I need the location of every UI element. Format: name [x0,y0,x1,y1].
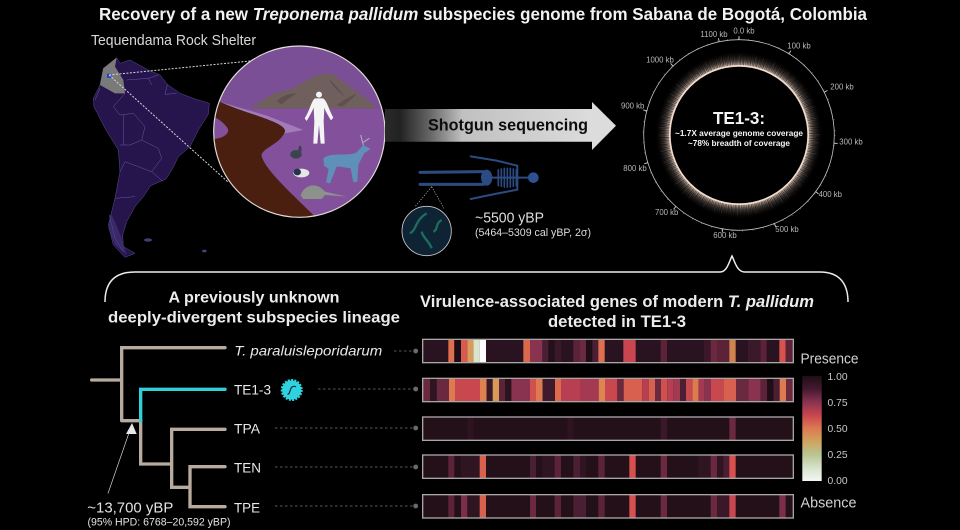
human [305,92,333,144]
coverage summary: ~1.7X average genome coverage [675,128,803,138]
tree tip labels: TE1-3 [234,381,271,397]
sample date: (5464–5309 cal yBP, 2σ) [475,227,591,239]
sample date: ~5500 yBP [475,210,544,226]
legend: 0.25 [828,450,848,461]
map: South America [93,58,209,257]
tree tip labels: T. paraluisleporidarum [234,342,383,358]
row: T. paraluisleporidarum [423,339,793,363]
scale labels: 500 kb [775,225,799,234]
heading: lineage: A previously unknown [168,290,340,306]
rabbit [290,146,302,159]
scale labels: 1000 kb [646,56,675,64]
scale labels [621,26,863,240]
scale labels: 800 kb [623,164,647,173]
Colombia [100,58,125,93]
TE1-3 branch [141,389,225,421]
tree tip labels: TPE [234,500,260,516]
tree tip labels: TPA [234,420,261,436]
deer [323,135,371,183]
divergence arrow [108,423,137,493]
microscope inset: bacteria [402,187,451,256]
legend: 0.50 [828,424,848,435]
river [220,102,303,134]
scale labels: 400 kb [819,190,843,199]
skeleton [420,156,539,199]
tree tip labels [234,342,383,516]
legend: Presence [800,350,858,367]
coverage summary: ~78% breadth of coverage [688,138,790,148]
row: TPA [423,417,793,440]
legend: 1.00 [828,372,848,383]
scale labels: 700 kb [655,208,679,217]
scale labels: 0.0 kb [733,26,755,36]
row: TE1-3 [423,378,793,402]
phylogenetic tree [92,348,225,507]
site label: Tequendama Rock Shelter [91,33,256,49]
heading: lineage: deeply-divergent subspecies lineage [108,310,400,326]
mountain [250,74,377,108]
circular genome coverage plot [621,26,863,240]
row: TEN [423,455,793,478]
scene circle [210,42,390,225]
title: Recovery of a new Treponema pallidum subspecies genome from Sabana de Bogotá, Colombia [99,4,867,24]
scale labels: 200 kb [830,82,854,92]
legend: 0.75 [828,398,848,409]
heading: virulence genes: Virulence-associated genes of modern T. pallidum [420,293,814,311]
scale labels: 300 kb [839,138,863,146]
guinea pig [293,169,309,177]
connector lines [275,349,418,508]
heading: lineage [108,290,400,326]
arrow: shotgun sequencing: Shotgun sequencing [428,116,588,135]
scale labels: 1100 kb [700,30,728,39]
arrow: shotgun sequencing [385,102,616,150]
coverage summary [675,108,803,148]
divergence date: (95% HPD: 6768–20,592 yBP) [88,517,230,529]
legend: 0.00 [828,476,848,487]
zoom lines [109,61,250,182]
heatmap [423,339,793,518]
coverage summary: TE1-3: [713,108,765,128]
scale labels: 900 kb [621,102,645,110]
row: TPE [423,495,793,518]
tree tip labels: TEN [234,460,261,476]
scale labels: 100 kb [787,42,811,50]
divergence date: ~13,700 yBP [87,499,173,516]
icon: bacterium badge [282,380,302,400]
bracket [105,256,848,302]
legend: Absence [800,495,856,512]
site marker [107,74,111,78]
heading: virulence genes [420,293,814,331]
scale labels: 600 kb [713,231,737,240]
armadillo [301,185,347,199]
legend [800,350,858,512]
heading: virulence genes: detected in TE1-3 [548,313,686,331]
sample date [475,210,591,239]
divergence date [87,499,230,529]
